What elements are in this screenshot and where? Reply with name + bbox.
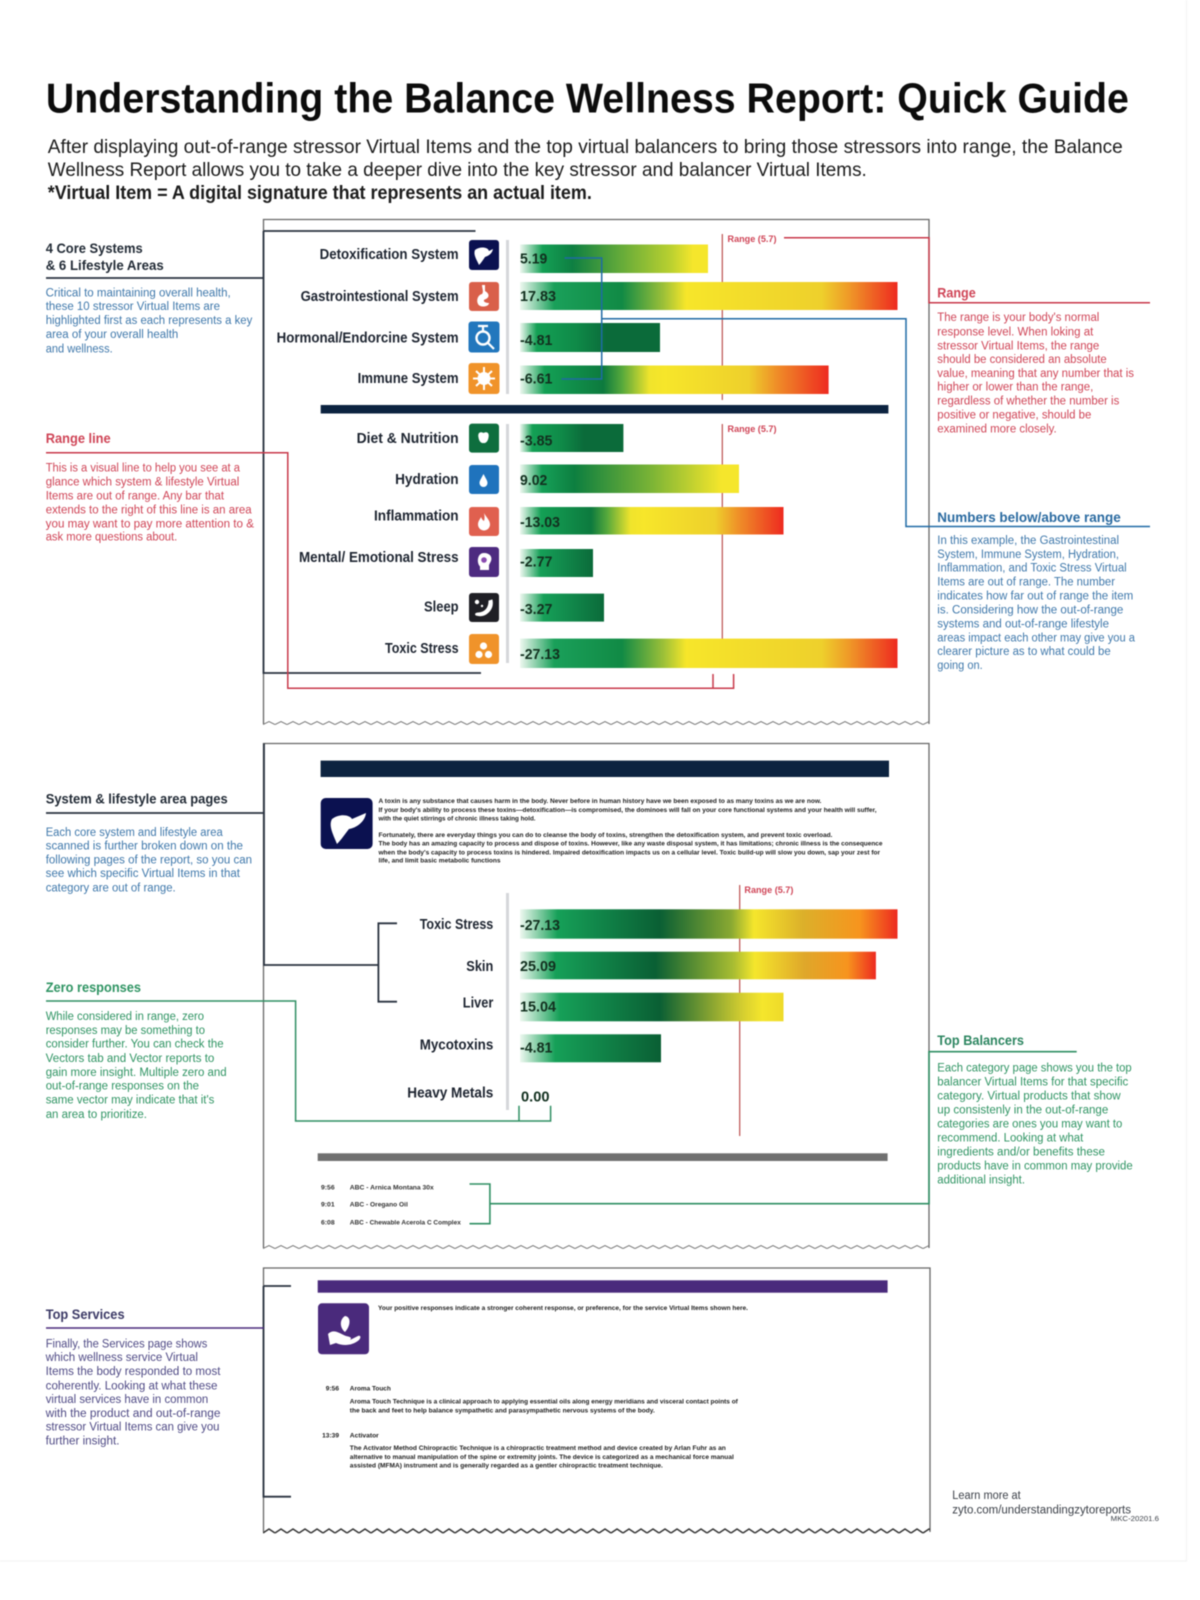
top balancers list: 9:56 bbox=[321, 1185, 335, 1192]
callout: top balancers: recommend. Looking at what bbox=[937, 1132, 1084, 1144]
range line bbox=[739, 885, 741, 1136]
row: Toxic Stress: -27.13 bbox=[520, 917, 560, 934]
top balancers list bbox=[321, 1185, 461, 1226]
range label top: Range (5.7) bbox=[728, 234, 776, 245]
callout: range line: This is a visual line to help you see at a bbox=[46, 462, 241, 474]
panel: services page report frame bbox=[263, 1268, 930, 1535]
page header bar bbox=[321, 761, 889, 777]
callout: zero responses: responses may be something to bbox=[46, 1025, 205, 1037]
callout: top balancers: up consistenly in the out-of-range bbox=[937, 1105, 1108, 1117]
page header bar bbox=[318, 1280, 888, 1293]
service: Activator: alternative to manual manipulation of the spine or extremity joints. The device is categorized as a mechanical force manual bbox=[350, 1454, 734, 1461]
footer: learn more: MKC-20201.6 bbox=[1111, 1514, 1159, 1523]
callout: range: higher or lower than the range, bbox=[937, 381, 1093, 393]
callout: zero responses: consider further. You can check the bbox=[46, 1038, 224, 1050]
row: Hormonal/Endorcine System: Hormonal/Endorcine System bbox=[277, 330, 459, 346]
intro paragraph: *Virtual Item = A digital signature that represents an actual item. bbox=[48, 182, 592, 204]
callout: zero responses: same vector may indicate that it's bbox=[46, 1095, 215, 1107]
callout: top services: further insight. bbox=[46, 1436, 120, 1448]
callout: top balancers: additional insight. bbox=[937, 1174, 1025, 1186]
callout: top balancers: Top Balancers bbox=[937, 1032, 1024, 1048]
callout: top services: Finally, the Services page shows bbox=[46, 1339, 208, 1351]
callout: zero responses: While considered in range, zero bbox=[46, 1011, 204, 1023]
row: Diet & Nutrition bbox=[357, 424, 623, 453]
row: Hydration bbox=[395, 464, 739, 494]
row: Detoxification System: 5.19 bbox=[520, 250, 547, 268]
row: Mental/ Emotional Stress: Mental/ Emotional Stress bbox=[299, 550, 459, 566]
row: Immune System: Immune System bbox=[358, 371, 459, 387]
row: Heavy Metals: Heavy Metals bbox=[407, 1085, 493, 1101]
callout: numbers below/above range: clearer picture as to what could be bbox=[937, 646, 1111, 658]
row: Skin: Skin bbox=[466, 959, 493, 975]
callout: range line: glance which system & lifestyle Virtual bbox=[46, 477, 239, 489]
intro copy: Fortunately, there are everyday things you can do to cleanse the body of toxins, strengthen the detoxification system, and prevent toxic overload. bbox=[378, 832, 833, 839]
top balancers list: 6:08 bbox=[321, 1219, 335, 1226]
callout: range: Range bbox=[937, 284, 976, 300]
callout: top balancers: balancer Virtual Items for that specific bbox=[937, 1077, 1129, 1089]
row: Skin bbox=[466, 952, 876, 979]
callout: numbers below/above range: indicates how far out of range the item bbox=[937, 591, 1133, 603]
callout: top balancers: category. Virtual products that show bbox=[937, 1091, 1121, 1103]
callout: range: should be considered an absolute bbox=[937, 354, 1107, 366]
service: Aroma Touch: 9:56 bbox=[326, 1386, 339, 1392]
callout: zero responses: gain more insight. Multiple zero and bbox=[46, 1067, 227, 1079]
row: Hormonal/Endorcine System bbox=[277, 322, 660, 352]
connector: zero responses bbox=[46, 1001, 551, 1121]
row: Hydration: 9.02 bbox=[520, 472, 547, 489]
callout: 4 core systems and 6 lifestyle areas: these 10 stressor Virtual Items are bbox=[46, 301, 220, 313]
row: Liver bbox=[463, 993, 784, 1021]
top balancers list: 9:01 bbox=[321, 1202, 335, 1209]
row: Diet & Nutrition: -3.85 bbox=[520, 432, 552, 450]
callout: 4 core systems and 6 lifestyle areas bbox=[46, 240, 253, 355]
service: Activator: The Activator Method Chiropractic Technique is a chiropractic treatment method and device created by Arlan Fuhr as an bbox=[350, 1445, 726, 1452]
callout: top services: which wellness service Virtual bbox=[45, 1352, 198, 1364]
callout: range: positive or negative, should be bbox=[937, 410, 1091, 422]
callout: system and lifestyle area pages: see which specific Virtual Items in that bbox=[46, 868, 241, 880]
callout: top services: Top Services bbox=[46, 1306, 125, 1322]
range label: Range (5.7) bbox=[744, 885, 793, 896]
range line bottom chart bbox=[721, 424, 723, 661]
intro copy: The body has an amazing capacity to process and dispose of toxins. However, like any waste disposal system, it has limitations; chronic illness is the consequence bbox=[378, 840, 883, 847]
callout: top balancers bbox=[937, 1032, 1133, 1186]
row: Toxic Stress bbox=[420, 909, 898, 939]
service: Aroma Touch: the back and feet to help balance sympathetic and parasympathetic nervous systems of the body. bbox=[350, 1407, 655, 1414]
service: Activator: assisted (MFMA) instrument and is generally regarded as a gentler chiropractic treatment technique. bbox=[350, 1462, 663, 1469]
intro copy bbox=[378, 798, 883, 864]
callout: top balancers: categories are ones you may want to bbox=[937, 1119, 1122, 1131]
callout: top services: coherently. Looking at what these bbox=[46, 1380, 218, 1392]
footer: learn more: Learn more at bbox=[952, 1490, 1021, 1502]
service: Activator: 13:39 bbox=[322, 1433, 339, 1440]
callout: 4 core systems and 6 lifestyle areas: & 6 Lifestyle Areas bbox=[46, 257, 164, 273]
callout: system and lifestyle area pages: following pages of the report, so you can bbox=[46, 855, 252, 867]
top balancers list: ABC - Arnica Montana 30x bbox=[350, 1185, 434, 1192]
callout: range line: Range line bbox=[46, 430, 111, 446]
row: Inflammation: -13.03 bbox=[520, 514, 560, 531]
connector: range line callout bbox=[46, 453, 734, 688]
callout: top balancers: products have in common may provide bbox=[937, 1160, 1133, 1172]
row: Heavy Metals bbox=[407, 1085, 550, 1106]
callout: range: The range is your body's normal bbox=[937, 312, 1099, 324]
callout: system and lifestyle area pages: System & lifestyle area pages bbox=[46, 791, 228, 807]
callout: numbers below/above range: System, Immune System, Hydration, bbox=[937, 549, 1119, 561]
callout: 4 core systems and 6 lifestyle areas: and wellness. bbox=[46, 343, 113, 355]
intro copy: A toxin is any substance that causes harm in the body. Never before in human history have we been exposed to as many toxins as we are now. bbox=[378, 798, 822, 805]
row: Toxic Stress bbox=[385, 634, 898, 668]
callout: zero responses: out-of-range responses on the bbox=[46, 1080, 199, 1092]
connector: top balancers bbox=[470, 1052, 1077, 1224]
row: Immune System: -6.61 bbox=[520, 370, 552, 388]
callout: range: value, meaning that any number that is bbox=[937, 368, 1134, 380]
callout: range bbox=[937, 284, 1134, 436]
row: Heavy Metals: 0.00 bbox=[521, 1089, 550, 1106]
callout: range line: ask more questions about. bbox=[46, 532, 177, 544]
callout: top services: stressor Virtual Items can give you bbox=[46, 1421, 220, 1433]
row: Sleep: Sleep bbox=[424, 600, 459, 616]
row: Detoxification System: Detoxification System bbox=[320, 247, 459, 263]
service: Aroma Touch: Aroma Touch bbox=[350, 1386, 391, 1392]
callout: top balancers: ingredients and/or benefits these bbox=[937, 1146, 1105, 1158]
footer: learn more bbox=[952, 1490, 1159, 1523]
callout: top services: with the product and out-of-range bbox=[45, 1408, 220, 1420]
callout: zero responses bbox=[46, 979, 227, 1121]
row: Mental/ Emotional Stress bbox=[299, 547, 593, 577]
callout: top services: Items the body responded to most bbox=[46, 1366, 221, 1378]
row: Toxic Stress: -27.13 bbox=[520, 646, 560, 663]
callout: system and lifestyle area pages bbox=[46, 791, 252, 894]
service: Aroma Touch bbox=[326, 1386, 739, 1414]
callout: 4 core systems and 6 lifestyle areas: area of your overall health bbox=[46, 329, 178, 341]
callout: 4 core systems and 6 lifestyle areas: highlighted first as each represents a key bbox=[46, 315, 253, 327]
service: Activator bbox=[322, 1433, 734, 1469]
panel: category page report frame bbox=[263, 744, 929, 1251]
row: Gastrointestional System bbox=[301, 282, 898, 311]
service: Activator: Activator bbox=[350, 1433, 379, 1440]
callout: top services bbox=[45, 1306, 221, 1448]
callout: top balancers: Each category page shows you the top bbox=[937, 1063, 1132, 1075]
icon: hand with leaf bbox=[318, 1303, 369, 1354]
row: Mycotoxins: Mycotoxins bbox=[420, 1038, 493, 1054]
intro copy: If your body's ability to process these toxins—detoxification—is compromised, the dominoes will fall on your core functional systems and your health will suffer, bbox=[378, 807, 877, 814]
callout: range line: you may want to pay more attention to & bbox=[46, 518, 254, 530]
row: Immune System bbox=[358, 363, 829, 394]
callout: range: response level. When loking at bbox=[937, 326, 1094, 338]
intro paragraph bbox=[48, 136, 1123, 204]
service: Aroma Touch: Aroma Touch Technique is a clinical approach to applying essential oils along energy meridians and visceral contact points of bbox=[350, 1398, 739, 1406]
connector: system bracket bbox=[46, 744, 397, 1002]
connector: core systems heading line bbox=[46, 277, 264, 279]
row: Diet & Nutrition: Diet & Nutrition bbox=[357, 431, 459, 447]
callout: range line bbox=[46, 430, 254, 544]
row: Inflammation: Inflammation bbox=[374, 508, 459, 524]
callout: numbers below/above range: Numbers below/above range bbox=[937, 509, 1121, 525]
connector: top services bbox=[46, 1327, 264, 1329]
title: Understanding the Balance Wellness Report: Quick Guide bbox=[46, 74, 1129, 122]
range line top chart bbox=[721, 234, 723, 400]
row: Sleep bbox=[424, 593, 604, 622]
intro copy: with the quiet stirrings of chronic illness taking hold. bbox=[378, 816, 536, 823]
callout: top services: virtual services have in common bbox=[46, 1394, 208, 1406]
top balancers list: ABC - Chewable Acerola C Complex bbox=[350, 1219, 461, 1226]
row: Gastrointestional System: 17.83 bbox=[520, 288, 556, 305]
intro copy: when the body's capacity to process toxins is hindered. Impaired detoxification impacts us on a cellular level. Toxic build-up will slow you down, sap your zest for bbox=[378, 849, 880, 856]
row: Inflammation bbox=[374, 507, 784, 536]
callout: numbers below/above range: In this example, the Gastrointestinal bbox=[937, 535, 1119, 547]
row: Mental/ Emotional Stress: -2.77 bbox=[520, 554, 552, 570]
row: Liver: Liver bbox=[463, 996, 494, 1012]
row: Toxic Stress: Toxic Stress bbox=[420, 917, 493, 933]
callout: numbers below/above range: Items are out of range. The number bbox=[937, 577, 1115, 589]
intro paragraph: After displaying out-of-range stressor Virtual Items and the top virtual balancers to bring those stressors into range, the Balance bbox=[48, 136, 1123, 158]
callout: range line: extends to the right of this line is an area bbox=[46, 504, 252, 516]
callout: zero responses: Zero responses bbox=[46, 979, 141, 995]
callout: numbers below/above range: Inflammation, and Toxic Stress Virtual bbox=[937, 562, 1127, 574]
callout: numbers below/above range bbox=[937, 509, 1136, 672]
callout: numbers below/above range: areas impact each other may give you a bbox=[937, 632, 1136, 644]
icon: liver bbox=[321, 798, 373, 849]
row: Skin: 25.09 bbox=[520, 958, 556, 975]
row: Liver: 15.04 bbox=[520, 999, 557, 1016]
connector: numbers below and above range bbox=[561, 258, 1150, 526]
divider: navy separator bbox=[321, 405, 888, 414]
callout: range: stressor Virtual Items, the range bbox=[937, 340, 1099, 352]
footer: learn more: zyto.com/understandingzytoreports bbox=[952, 1504, 1131, 1516]
callout: zero responses: Vectors tab and Vector reports to bbox=[46, 1053, 214, 1065]
intro paragraph: Wellness Report allows you to take a deeper dive into the key stressor and balancer Virtual Items. bbox=[48, 159, 867, 181]
callout: 4 core systems and 6 lifestyle areas: 4 Core Systems bbox=[46, 240, 143, 256]
callout: system and lifestyle area pages: Each core system and lifestyle area bbox=[46, 827, 223, 839]
callout: system and lifestyle area pages: category are out of range. bbox=[46, 882, 176, 894]
callout: numbers below/above range: going on. bbox=[937, 660, 983, 672]
row: Gastrointestional System: Gastrointestional System bbox=[301, 289, 459, 305]
callout: range: examined more closely. bbox=[937, 424, 1057, 436]
row: Sleep: -3.27 bbox=[520, 601, 552, 618]
callout: numbers below/above range: is. Considering how the out-of-range bbox=[937, 604, 1123, 616]
intro copy: life, and limit basic metabolic functions bbox=[378, 857, 501, 864]
callout: numbers below/above range: systems and out-of-range lifestyle bbox=[937, 618, 1109, 630]
intro copy: Your positive responses indicate a stronger coherent response, or preference, for the service Virtual Items shown here. bbox=[378, 1305, 748, 1312]
range label bottom: Range (5.7) bbox=[728, 424, 776, 435]
panel: system overview report frame bbox=[263, 220, 929, 727]
callout: system and lifestyle area pages: scanned is further broken down on the bbox=[46, 840, 243, 852]
connector: range callout line bbox=[784, 238, 1150, 303]
callout: 4 core systems and 6 lifestyle areas: Critical to maintaining overall health, bbox=[46, 288, 231, 300]
row: Detoxification System bbox=[320, 240, 708, 273]
row: Mycotoxins bbox=[420, 1034, 661, 1062]
top balancers list: ABC - Oregano Oil bbox=[350, 1202, 408, 1209]
callout: zero responses: an area to prioritize. bbox=[46, 1109, 147, 1121]
row: Toxic Stress: Toxic Stress bbox=[385, 641, 459, 657]
row: Mycotoxins: -4.81 bbox=[520, 1040, 552, 1057]
row: Hormonal/Endorcine System: -4.81 bbox=[520, 332, 552, 349]
row: Hydration: Hydration bbox=[395, 472, 459, 488]
callout: range: regardless of whether the number is bbox=[937, 396, 1120, 408]
callout: range line: Items are out of range. Any bar that bbox=[46, 491, 225, 503]
